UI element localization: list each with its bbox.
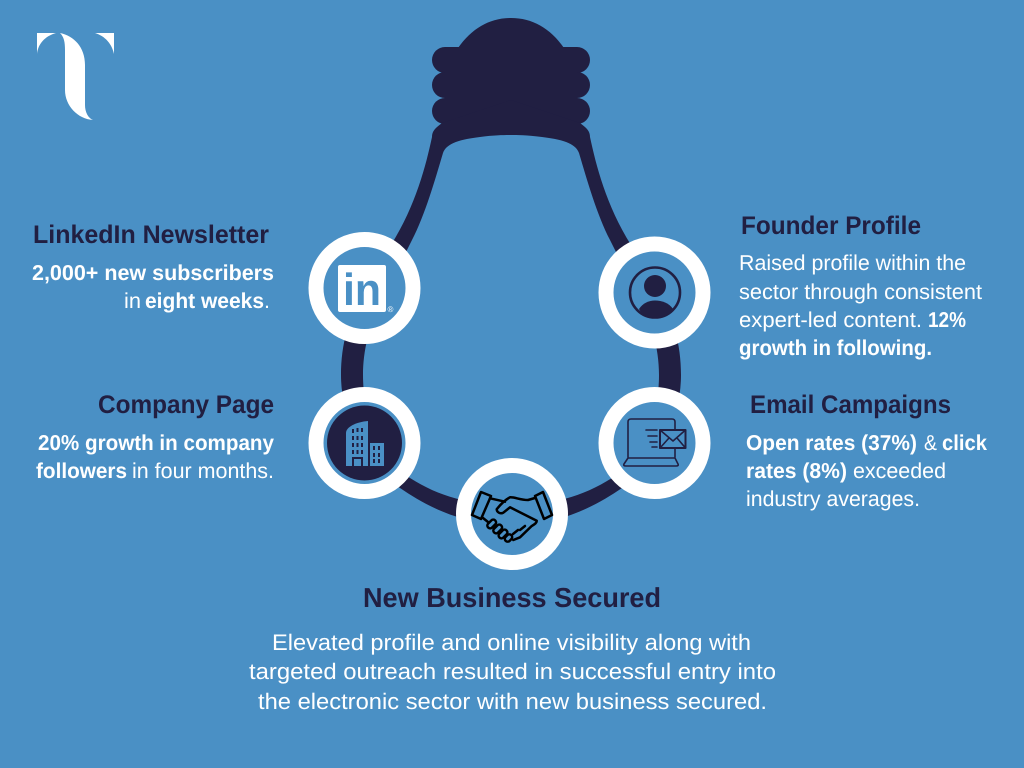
text: company results: 20% growth in company: [38, 431, 274, 455]
bulb glass left: [341, 100, 511, 525]
text: email results: [746, 431, 987, 511]
light bulb outline: [341, 18, 681, 525]
text: email results: industry averages.: [746, 487, 920, 511]
text: company results: [36, 431, 274, 483]
bulb glass right: [511, 100, 681, 525]
text: subscribers: eight weeks: [145, 289, 264, 313]
text: new business results: Elevated profile and online visibility along with: [272, 630, 751, 655]
text: email results: exceeded: [853, 459, 946, 483]
text: email results: click: [942, 431, 987, 455]
text: company results: in four months.: [132, 459, 274, 483]
icon: company building: [316, 394, 413, 492]
icon: founder profile: [606, 244, 703, 341]
heading: New Business Secured: New Business Secured: [363, 582, 661, 613]
text: email results: Open rates (37%): [746, 431, 917, 455]
text: email results: &: [924, 431, 937, 455]
heading: Company Page: Company Page: [98, 391, 274, 419]
text: founder results: 12%: [928, 308, 966, 332]
panel: Email Campaigns: [746, 391, 987, 511]
text: founder results: Raised profile within the: [739, 251, 966, 275]
text: company results: followers: [36, 459, 127, 483]
panel: LinkedIn Newsletter: [32, 221, 274, 313]
text: founder results: expert-led content.: [739, 308, 922, 332]
text: founder results: [739, 251, 982, 360]
panel: New Business Secured: [249, 582, 776, 714]
text: subscribers: .: [264, 289, 270, 313]
text: subscribers: in: [124, 289, 141, 313]
text: subscribers: [32, 261, 274, 313]
logo: [37, 33, 114, 120]
text: new business results: the electronic sector with new business secured.: [258, 689, 767, 714]
heading: LinkedIn Newsletter: LinkedIn Newsletter: [33, 221, 269, 249]
icon: LinkedIn: ®: [388, 305, 394, 314]
heading: Email Campaigns: Email Campaigns: [750, 391, 951, 419]
text: founder results: sector through consistent: [739, 280, 982, 304]
icon: handshake: [464, 466, 560, 562]
panel: Company Page: [36, 391, 274, 483]
icon: LinkedIn: [316, 240, 413, 336]
icon: LinkedIn: in: [343, 264, 381, 315]
text: email results: rates (8%): [746, 459, 847, 483]
heading: Founder Profile: Founder Profile: [741, 212, 921, 240]
bulb cap: [432, 18, 590, 124]
icon: email campaign: [606, 394, 703, 492]
text: new business results: targeted outreach resulted in successful entry into: [249, 659, 776, 684]
text: subscribers: 2,000+ new subscribers: [32, 261, 274, 285]
text: founder results: growth in following.: [739, 336, 932, 360]
panel: Founder Profile: [739, 212, 982, 360]
text: new business results: [249, 630, 776, 714]
